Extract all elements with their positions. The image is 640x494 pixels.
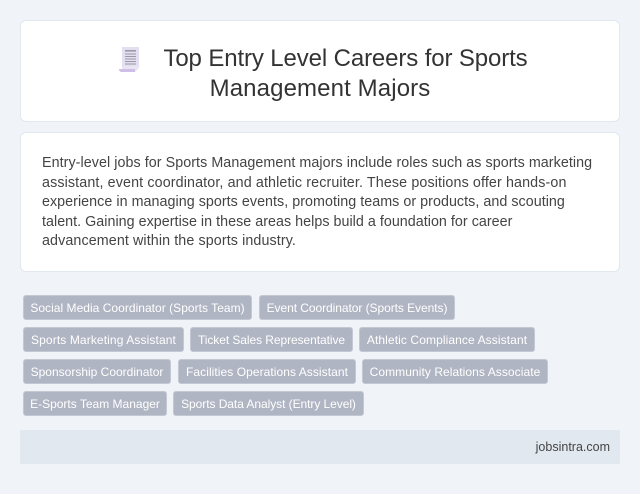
text block: description: Entry-level jobs for Sports Management majors include roles such as sports marketing [42, 155, 592, 171]
tag: E-Sports Team Manager: E-Sports Team Manager [30, 397, 160, 411]
tag: Athletic Compliance Assistant [359, 327, 535, 352]
icon: document scroll [119, 47, 139, 72]
tag: Facilities Operations Assistant [178, 359, 356, 384]
tag: E-Sports Team Manager [23, 391, 167, 416]
tag: Ticket Sales Representative [190, 327, 353, 352]
tag: Ticket Sales Representative: Ticket Sales Representative [198, 333, 345, 347]
panel: header [20, 20, 620, 122]
tag: Event Coordinator: Event Coordinator (Sports Events) [267, 301, 447, 315]
tag: Event Coordinator [259, 295, 455, 320]
tag list [23, 295, 548, 416]
footer bar [20, 430, 620, 464]
panel: description [20, 132, 620, 272]
text block: description: advancement within the sports industry. [42, 233, 296, 249]
title: Management Majors [210, 74, 430, 102]
tag: Social Media Coordinator [23, 295, 252, 320]
title [163, 45, 528, 102]
tag: Sports Marketing Assistant: Sports Marketing Assistant [31, 333, 176, 347]
tag: Social Media Coordinator: Social Media Coordinator (Sports Team) [30, 301, 245, 315]
tag: Community Relations Associate: Community Relations Associate [370, 365, 540, 379]
tag: Sports Marketing Assistant [23, 327, 184, 352]
tag: Sports Data Analyst: Sports Data Analyst (Entry Level) [181, 397, 356, 411]
tag: Community Relations Associate [362, 359, 548, 384]
tag: Sponsorship Coordinator [23, 359, 171, 384]
tag: Sponsorship Coordinator: Sponsorship Coordinator [31, 365, 163, 379]
tag: Sports Data Analyst [173, 391, 364, 416]
text block: description: assistant, event coordinator, and athletic recruiter. These positions offer hands-on [42, 174, 567, 190]
text block: description [42, 155, 592, 249]
title: Top Entry Level Careers for Sports [163, 45, 528, 72]
text block: description: experience in managing sports events, promoting teams or products, and scouting [42, 194, 565, 210]
text block: description: talent. Gaining expertise in these areas helps build a foundation for career [42, 214, 512, 230]
source credit: jobsintra.com [536, 440, 610, 454]
tag: Athletic Compliance Assistant: Athletic Compliance Assistant [367, 333, 527, 347]
tag: Facilities Operations Assistant: Facilities Operations Assistant [186, 365, 348, 379]
